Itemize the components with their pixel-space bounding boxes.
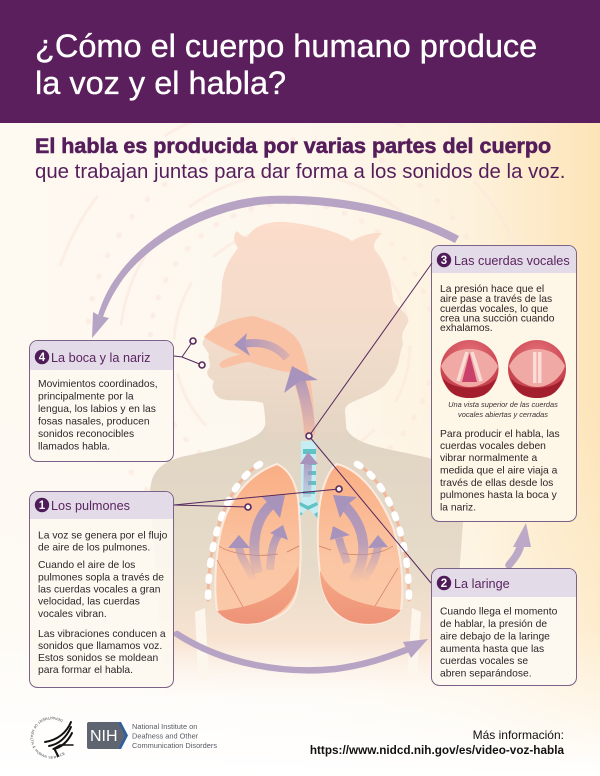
text: pulmones sopla a través de [38,572,164,584]
illustration: closed vocal folds [508,340,566,398]
text: Movimientos coordinados, [38,379,158,390]
logo: NIH: Deafness and Other [132,732,199,740]
title: ¿Cómo el cuerpo humano produce [35,28,537,64]
panel: las cuerdas vocales [432,246,576,522]
right lung [318,464,402,624]
subtitle: que trabajan juntas para dar forma a los sonidos de la voz. [35,161,565,183]
text: Para producir el habla, las [440,429,560,440]
heading: Las cuerdas vocales [454,254,570,268]
text [38,379,158,452]
text: las cuerdas vocales a gran [38,584,161,596]
heading: 3 [441,255,447,267]
text: Cuando llega el momento [440,606,558,618]
text: La presión hace que el [440,284,544,295]
text: crea una succión cuando [440,314,555,324]
panel: la boca y la nariz [30,340,174,462]
heading: Los pulmones [51,499,130,513]
logo: NIH [87,722,217,750]
text: fosas nasales, producen [38,416,150,428]
text: abren separándose. [440,668,532,680]
heading: 4 [39,352,46,364]
illustration: open vocal folds [440,340,498,398]
header band [0,0,600,123]
text: llamados habla. [38,442,110,452]
trachea [294,441,326,524]
arrow: from larynx to vocal folds [509,523,531,565]
logo: NIH: National Institute on [132,722,197,731]
panel: los pulmones [30,492,174,688]
text: de aire de los pulmones. [38,542,150,554]
text: través de ellas desde los [440,478,553,489]
text: aumenta hasta que las [440,644,544,655]
text: vibrar normalmente a [440,453,538,464]
footer: more information: https://www.nidcd.nih.gov/es/video-voz-habla [310,744,564,757]
body silhouette [150,222,465,700]
text: pulmones hasta la boca y [440,490,558,501]
footer: more information [310,728,564,757]
arrow: from lungs to larynx [177,634,428,670]
heading: 1 [39,500,46,512]
heading: La laringe [454,577,510,591]
subtitle: El habla es producida por varias partes del cuerpo [35,134,551,158]
text [440,284,555,334]
title [35,28,537,101]
footer: more information: Más información: [473,728,564,742]
text: lengua, los labios y en las [38,404,156,415]
lower lobes [217,566,299,624]
text: aire pase a través de las [440,294,552,305]
text: Estos sonidos se moldean [38,653,158,664]
text: medida que el aire viaja a [440,466,558,476]
text [440,606,558,680]
text: cuerdas vocales se [440,656,528,667]
lung arrows [228,495,388,583]
subtitle [35,134,565,183]
logo: NIH: Communication Disorders [132,741,217,750]
logo: HHS seal [30,716,74,759]
text: aire debajo de la laringe [440,632,550,642]
text: sonidos reconocibles [38,429,134,440]
text: para formar el habla. [38,665,133,676]
text: Cuando el aire de los [38,560,135,571]
lungs [215,464,402,624]
text: Las vibraciones conducen a [38,629,166,640]
decorative sound rings [47,100,537,590]
title: la voz y el habla? [35,65,286,101]
logo: HHS seal: DEPARTMENT OF HEALTH & HUMAN SERVICES USA [30,716,65,759]
panel: la laringe [432,568,576,686]
text: velocidad, las cuerdas [38,596,140,608]
cream arm gaps [195,608,421,680]
ribs [208,464,409,600]
head and neck [203,222,408,440]
text: La voz se genera por el flujo [38,530,168,542]
heading: 2 [441,578,447,590]
text: sonidos que llamamos voz. [38,641,162,652]
arrow: large arc from vocal folds to mouth [92,196,459,338]
text: de hablar, la presión de [440,619,547,630]
arrow: air up throat [284,366,318,434]
logo: NIH: NIH [90,728,118,745]
text [440,429,560,514]
text [38,530,168,676]
air passage through nose, mouth and throat [204,316,315,435]
text: cuerdas vocales, lo que [440,304,548,315]
caption [448,400,558,419]
text: vocales vibran. [38,609,107,620]
lung fissures [217,546,398,607]
callout lines [174,263,432,583]
left lung [215,464,301,624]
text: exhalamos. [440,323,493,334]
arrow: air to mouth [234,333,287,358]
text: la nariz. [440,502,476,514]
caption: Una vista superior de las cuerdas [448,400,558,409]
heading: La boca y la nariz [51,351,150,365]
text: cuerdas vocales deben [440,441,546,452]
text: principalmente por la [38,392,134,402]
caption: vocales abiertas y cerradas [458,410,548,419]
torso [150,425,465,700]
